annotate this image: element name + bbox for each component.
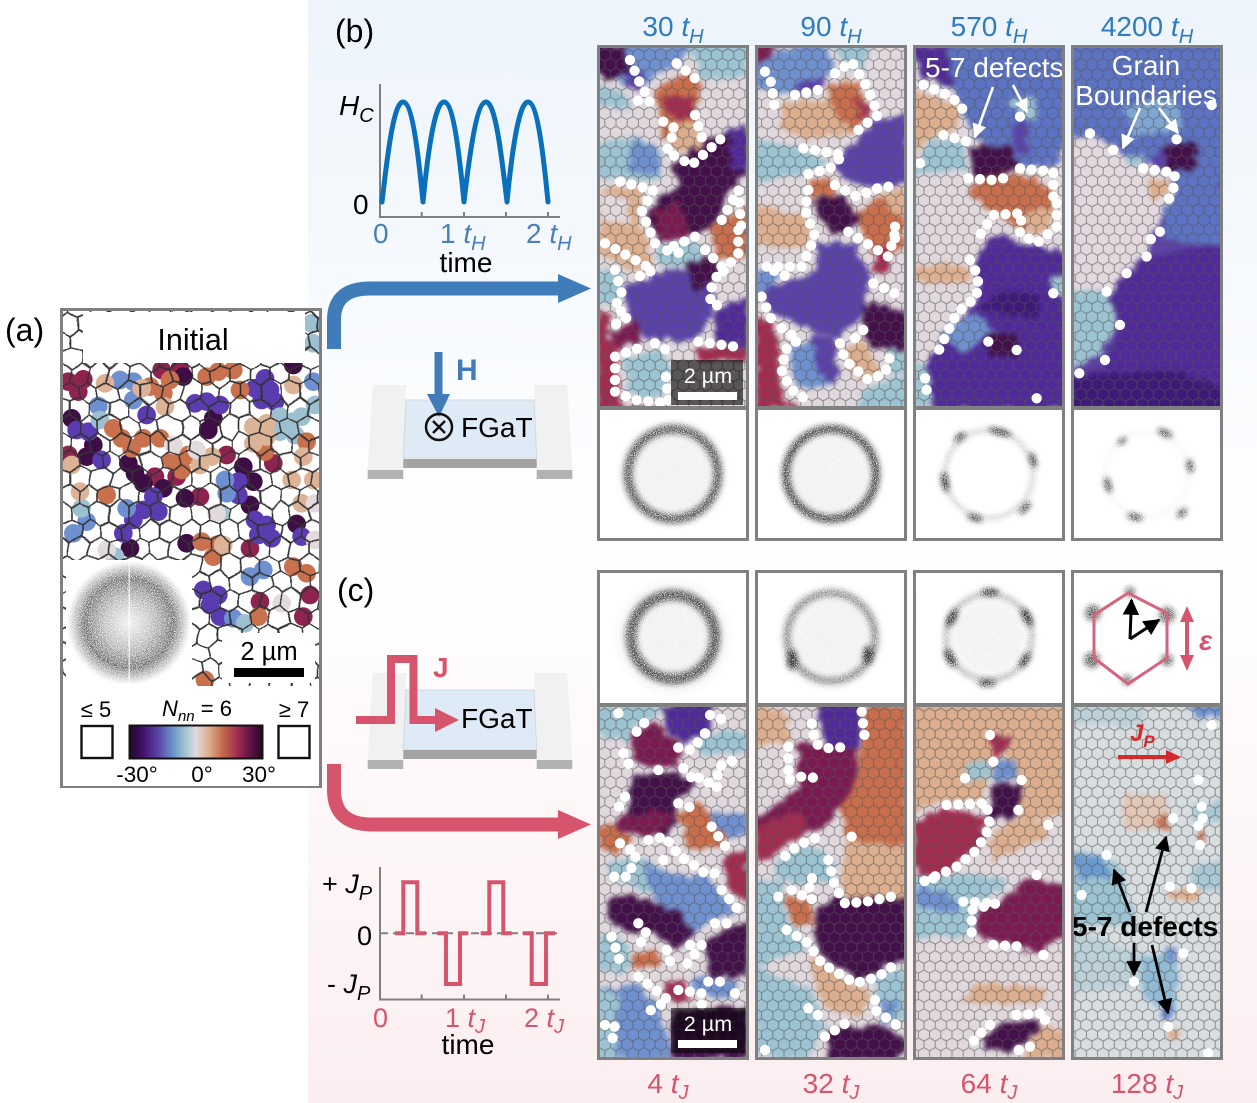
diffraction: 64 tJ [914,572,1064,704]
current direction arrow JP: J [1130,720,1143,747]
scale bar: 2 µm [684,364,732,388]
heading row: field cycles: H [1179,26,1194,48]
chart: field amplitude vs time: H [557,233,572,255]
reciprocal vector right [1130,620,1159,639]
heading row: field cycles: H [689,26,704,48]
panel: lattice map 90 tH [755,43,908,410]
strain arrow: ε [1199,625,1213,656]
label (a): (a) [5,312,44,348]
annotation: grain boundaries with white arrows: Boundaries [1075,80,1217,111]
diffraction: 128 tJ with lattice hexagon and strain arrow [1072,572,1222,704]
chart: field amplitude vs time: time [440,247,492,278]
annotation: 5-7 defects with black arrows [1072,837,1218,1013]
scale bar [671,360,743,405]
chart: current pulses vs time: 1 t [445,1003,475,1033]
reciprocal vector up [1130,600,1132,639]
legend: neighbour count and twist angle: nn [178,708,195,725]
scale bar 2 µm [222,633,315,683]
panel: lattice map 4 tJ [597,703,748,1060]
footer row: current cycles: 128 t [1111,1068,1173,1099]
diffraction: 4 tJ [598,572,748,704]
legend: neighbour count and twist angle: N [162,696,178,721]
chart: current pulses vs time: P [359,883,373,905]
chart: current pulses vs time: - J [327,969,357,999]
chart: current pulses vs time: 0 [373,1003,388,1033]
panel: lattice map 128 tJ [1067,703,1227,1058]
heading row: field cycles: 4200 t [1101,11,1179,42]
diffraction: 90 tH [756,408,906,540]
arrow: blue from initial to field panels [334,274,591,349]
cell map: initial disordered lattice [63,311,319,686]
legend: neighbour count and twist angle: 30° [242,762,276,787]
scale bar [671,1008,745,1053]
annotation: 5-7 defects with white arrows [925,52,1064,137]
chart: current pulses vs time: 2 t [524,1003,554,1033]
footer row: current cycles: 32 t [803,1068,849,1099]
device schematic: field H on FGaT: H [456,354,478,387]
panel: lattice map 4200 tH [1074,48,1220,406]
strain arrow [1180,606,1213,671]
panel: (a) initial state [5,290,340,787]
legend: neighbour count and twist angle: = 6 [195,696,232,721]
current direction arrow JP: P [1143,732,1155,751]
panel: lattice map 64 tJ [912,703,1067,1060]
frames: field lattice maps [598,46,1222,408]
annotation: grain boundaries with white arrows [1075,50,1217,148]
chart: field amplitude vs time: 1 t [440,218,471,249]
scale bar 2 µm: 2 µm [240,638,298,666]
diffraction: 32 tJ [756,572,906,704]
title box: Initial [83,312,305,363]
legend: neighbour count and twist angle: -30° [116,762,158,787]
arrow: pink from initial to current panels [334,764,591,839]
panel: lattice map 32 tJ [755,703,908,1062]
heading row: field cycles: 30 t [642,11,689,42]
current direction arrow JP [1118,724,1181,764]
chart: current pulses vs time: + J [322,869,359,899]
legend: neighbour count and twist angle [63,687,319,787]
device schematic: current J on FGaT [356,652,572,769]
footer row: current cycles: 64 t [961,1068,1007,1099]
diffraction: 570 tH [914,408,1064,540]
chart: field amplitude vs time: H [339,90,360,121]
chart: current pulses vs time: J [553,1016,565,1038]
diffraction: 30 tH [598,408,748,540]
annotation: 5-7 defects with white arrows: 5-7 defects [925,52,1064,83]
chart: current pulses vs time [322,867,565,1060]
device schematic: current J on FGaT: J [433,652,449,683]
device schematic: field H on FGaT [368,352,572,479]
device schematic: current J on FGaT: FGaT [461,703,533,734]
heading row: field cycles: 90 t [800,11,847,42]
chart: field amplitude vs time [339,84,572,278]
panel: lattice map 30 tH [597,43,748,410]
chart: field amplitude vs time: H [471,233,486,255]
legend: neighbour count and twist angle: ≤ 5 [81,697,111,722]
diffraction: 4200 tH [1072,408,1222,540]
annotation: grain boundaries with white arrows: Grain [1112,50,1180,81]
footer row: current cycles: 4 t [647,1068,679,1099]
chart: field amplitude vs time: 2 t [526,218,557,249]
annotation: 5-7 defects with black arrows: 5-7 defects [1072,911,1218,942]
chart: current pulses vs time: time [442,1029,494,1060]
chart: field amplitude vs time: C [359,105,374,127]
label (c): (c) [337,572,374,608]
device schematic: field H on FGaT: FGaT [461,412,533,443]
frame of panel (a) [62,310,320,786]
legend: neighbour count and twist angle: ≥ 7 [279,697,309,722]
title box: Initial: Initial [157,323,229,357]
heading row: field cycles [642,11,1194,48]
panel: lattice map 570 tH [912,43,1067,410]
frames: current lattice maps [598,706,1222,1058]
heading row: field cycles: H [847,26,862,48]
inset: diffraction pattern, initial [66,560,192,686]
footer row: current cycles [647,1068,1184,1103]
chart: field amplitude vs time: 0 [373,218,389,249]
chart: current pulses vs time: J [474,1016,486,1038]
hexagon [1094,593,1167,684]
label (b): (b) [335,13,374,49]
heading row: field cycles: 570 t [951,11,1013,42]
chart: current pulses vs time: P [357,983,371,1005]
heading row: field cycles: H [1013,26,1028,48]
chart: field amplitude vs time: 0 [353,189,369,220]
scale bar: 2 µm [684,1012,732,1036]
chart: current pulses vs time: 0 [357,921,372,951]
legend: neighbour count and twist angle: 0° [191,762,213,787]
